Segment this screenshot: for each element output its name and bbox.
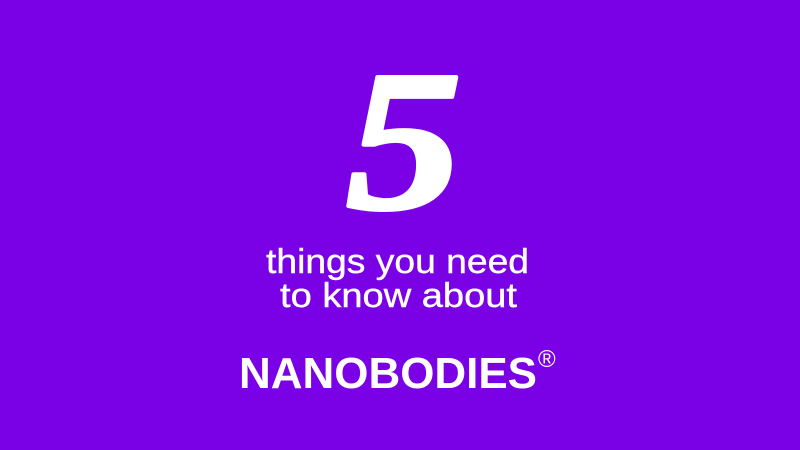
big numeral 5: 5	[346, 31, 462, 252]
subtitle text: things you need	[266, 243, 529, 281]
brand name NANOBODIES: NANOBODIES	[239, 349, 537, 398]
subtitle text: to know about	[280, 277, 518, 315]
subtitle text	[266, 243, 529, 315]
brand name NANOBODIES: ®	[538, 346, 556, 373]
